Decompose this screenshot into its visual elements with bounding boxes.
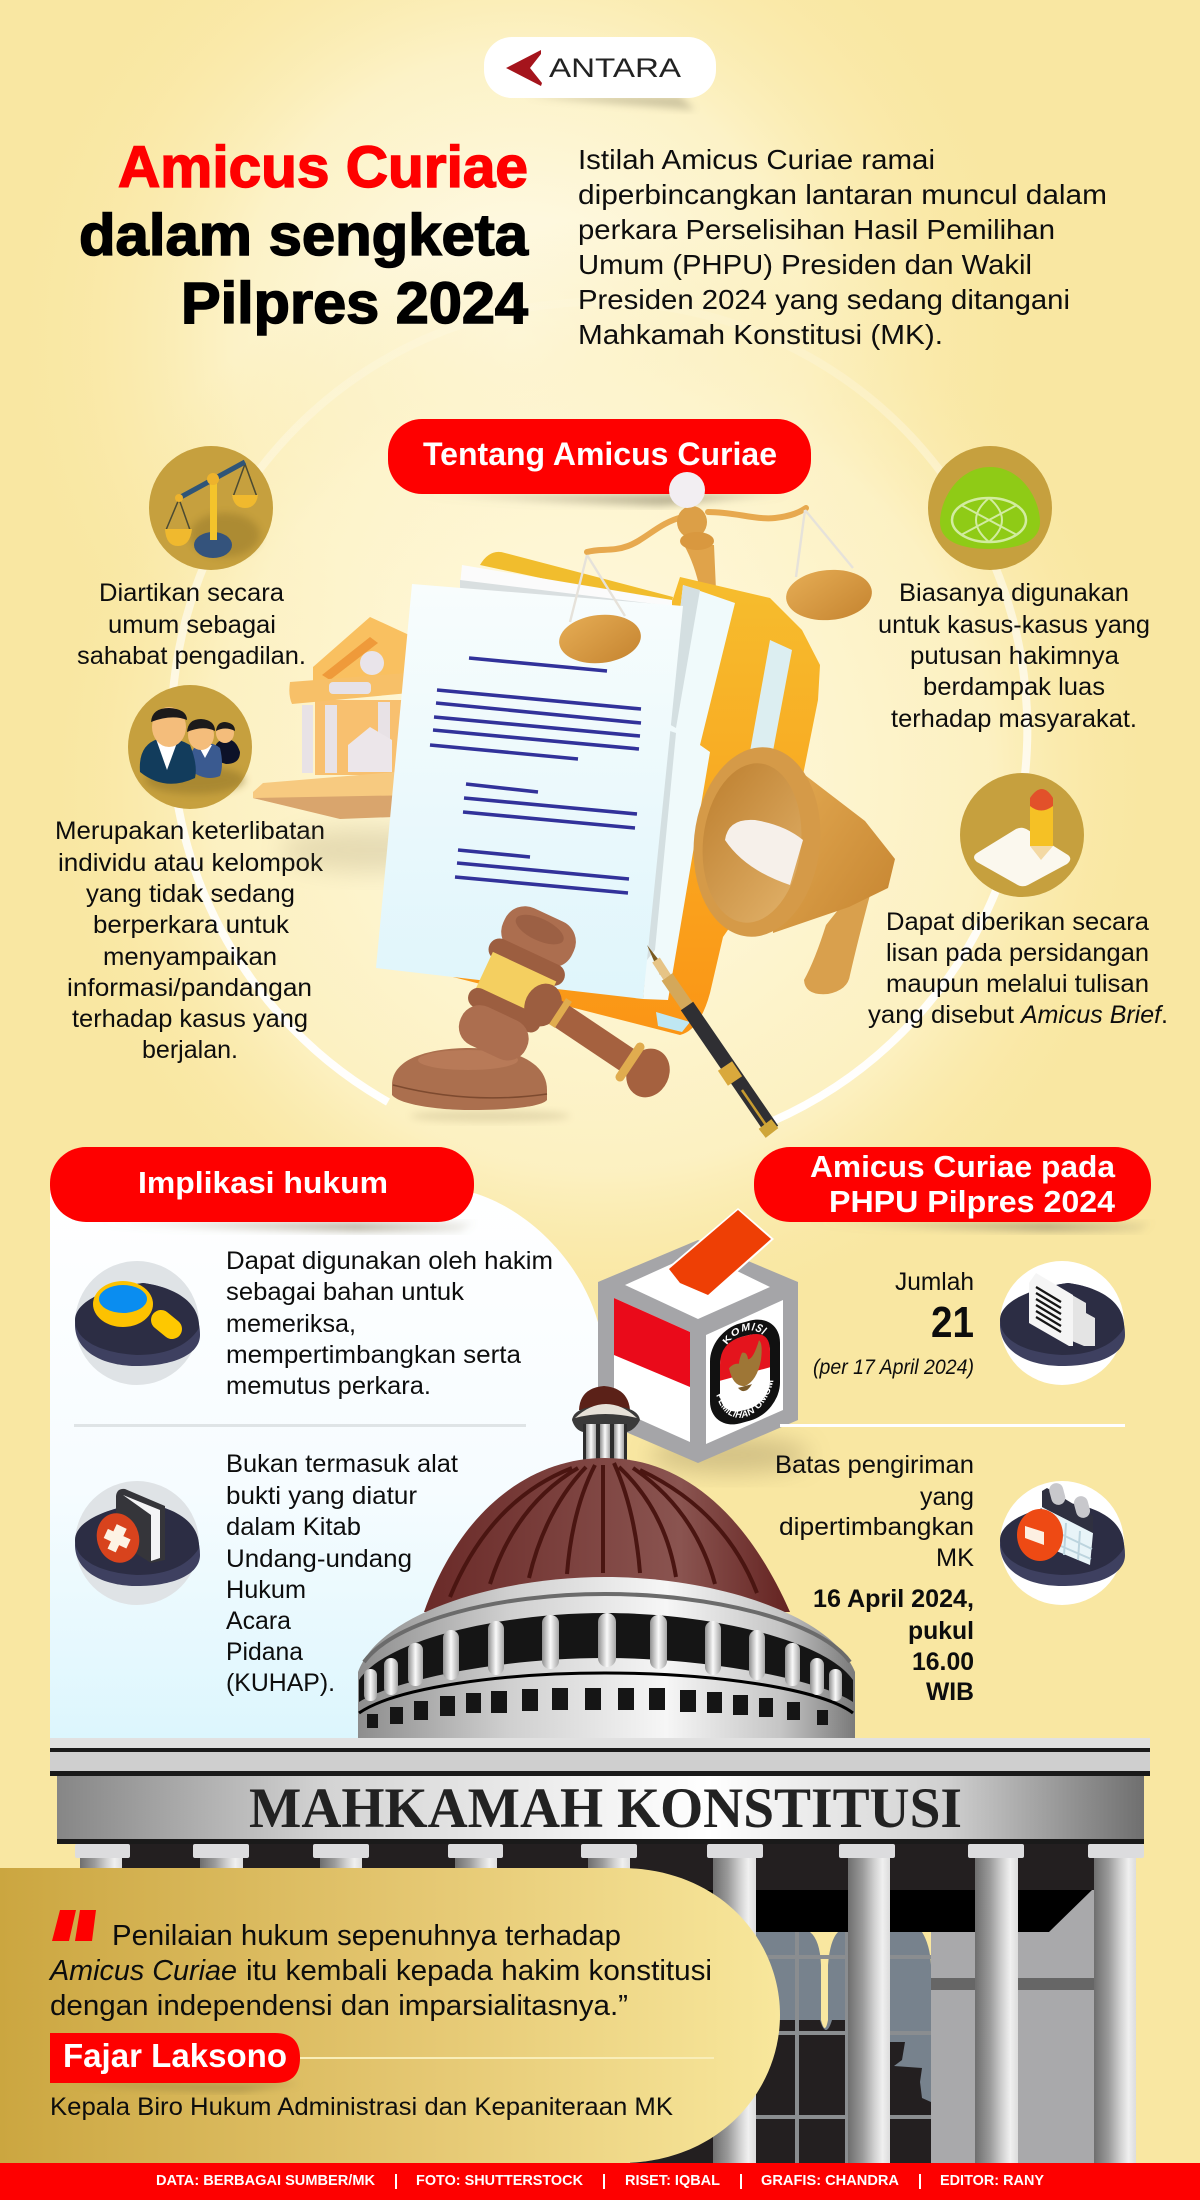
icon: fountain pen	[647, 945, 772, 1133]
text: kasus berdampak luas: terhadap masyarakat.	[891, 705, 1137, 733]
text: keterlibatan: informasi/pandangan	[67, 974, 312, 1002]
icon: calendar	[1000, 1481, 1125, 1605]
icon: gavel	[392, 898, 678, 1122]
logo: ANTARA	[484, 37, 716, 110]
text: keterlibatan: individu atau kelompok	[58, 849, 324, 877]
icon: KPU emblem: PEMILIHAN UMUM	[716, 1380, 774, 1418]
text: keterlibatan: berperkara untuk	[93, 911, 290, 939]
intro text	[578, 144, 1107, 350]
icon: ballot box	[598, 1208, 812, 1482]
text: batas pengiriman: 16 April 2024,	[813, 1585, 974, 1613]
text: lisan atau tulisan: lisan pada persidangan	[886, 939, 1149, 967]
text: definisi	[77, 579, 306, 670]
heading pill: Tentang Amicus Curiae: Tentang Amicus Curiae	[423, 436, 777, 472]
icon: book with cross	[75, 1481, 200, 1605]
text: lisan atau tulisan: maupun melalui tulisan	[886, 970, 1149, 998]
icon: quotation mark	[52, 1910, 96, 1941]
text: keterlibatan: yang tidak sedang	[86, 880, 295, 908]
logo: ANTARA: ANTARA	[549, 53, 681, 83]
icon: KPU emblem	[710, 1320, 780, 1424]
icon: document sheets	[376, 584, 735, 1000]
text: lisan atau tulisan	[868, 908, 1168, 1029]
icon: court building	[253, 617, 460, 872]
heading pill: PHPU Pilpres 2024: Amicus Curiae pada	[810, 1149, 1116, 1184]
quote text: Amicus Curiae	[48, 1955, 237, 1987]
icon: KPU emblem: KOMISI	[722, 1322, 768, 1344]
text: batas pengiriman: MK	[936, 1544, 974, 1572]
dome	[358, 1386, 855, 1740]
icon: people on gold circle	[128, 685, 252, 809]
footer credits: DATA: BERBAGAI SUMBER/MK	[156, 2172, 375, 2189]
icon: magnifier	[75, 1261, 200, 1385]
label: Mahkamah Konstitusi: MAHKAMAH KONSTITUSI	[249, 1777, 962, 1840]
quote text	[48, 1920, 712, 2022]
text: bukan alat bukti: dalam Kitab	[226, 1513, 361, 1541]
text: bukan alat bukti: (KUHAP).	[226, 1669, 335, 1697]
title: Amicus Curiae	[118, 135, 528, 200]
speaker name pill: Fajar Laksono	[63, 2037, 287, 2074]
intro text: perkara Perselisihan Hasil Pemilihan	[578, 214, 1055, 245]
text: batas pengiriman: Batas pengiriman	[775, 1451, 974, 1479]
intro text: Umum (PHPU) Presiden dan Wakil	[578, 249, 1032, 280]
text: lisan atau tulisan: .	[1161, 1001, 1168, 1029]
icon: documents	[1000, 1261, 1125, 1385]
heading pill: PHPU Pilpres 2024	[754, 1147, 1151, 1232]
text: batas pengiriman: pukul	[908, 1617, 974, 1645]
icon: big balance scale	[557, 472, 874, 667]
text: jumlah: 21	[931, 1298, 974, 1347]
quote text: dengan independensi dan imparsialitasnya.”	[50, 1990, 628, 2022]
text: bukan alat bukti: Acara	[226, 1607, 291, 1635]
text: kasus berdampak luas: berdampak luas	[923, 673, 1105, 701]
building entablature	[50, 1738, 1150, 1844]
icon: megaphone	[684, 741, 895, 994]
text: kasus berdampak luas	[878, 579, 1150, 733]
heading pill: Tentang Amicus Curiae	[388, 419, 811, 506]
drum	[358, 1577, 855, 1740]
text: bukan alat bukti: Pidana	[226, 1638, 303, 1666]
decorative ring behind illustration	[171, 302, 1027, 1121]
heading pill: PHPU Pilpres 2024: PHPU Pilpres 2024	[829, 1184, 1116, 1219]
icon: pencil on gold circle	[960, 773, 1084, 897]
speaker role: Kepala Biro Hukum Administrasi dan Kepaniteraan MK	[50, 2093, 673, 2121]
heading pill: Implikasi hukum: Implikasi hukum	[138, 1165, 388, 1200]
text: bukan alat bukti	[226, 1450, 458, 1697]
text: bukan alat bukti: Undang-undang	[226, 1545, 412, 1573]
text: keterlibatan: menyampaikan	[103, 943, 277, 971]
text: bahan pertimbangan: mempertimbangkan serta	[226, 1341, 521, 1369]
text: batas pengiriman: 16.00	[912, 1648, 974, 1676]
icon: orange folder	[453, 552, 820, 1035]
title: dalam sengketa	[79, 203, 529, 268]
panel background	[50, 1185, 612, 1740]
intro text: diperbincangkan lantaran muncul dalam	[578, 179, 1107, 210]
text: kasus berdampak luas: putusan hakimnya	[910, 642, 1119, 670]
text: keterlibatan: terhadap kasus yang	[72, 1005, 308, 1033]
dome cap	[424, 1458, 790, 1612]
building columns	[75, 1844, 1144, 2163]
icon: scale post	[684, 545, 716, 590]
title	[79, 135, 529, 336]
speaker name pill	[50, 2033, 714, 2092]
text: batas pengiriman: dipertimbangkan	[779, 1513, 974, 1541]
text: bukan alat bukti: Bukan termasuk alat	[226, 1450, 458, 1478]
title: Pilpres 2024	[181, 271, 528, 336]
illustration: gedung Mahkamah Konstitusi	[50, 1386, 1150, 2163]
text: jumlah: Jumlah	[895, 1268, 974, 1296]
text: kasus berdampak luas: untuk kasus-kasus yang	[878, 611, 1150, 639]
quote text: itu kembali kepada hakim konstitusi	[246, 1955, 712, 1987]
intro text: Mahkamah Konstitusi (MK).	[578, 319, 943, 350]
text: keterlibatan: Merupakan keterlibatan	[55, 817, 325, 845]
text: bukan alat bukti: bukti yang diatur	[226, 1482, 417, 1510]
text: jumlah	[813, 1268, 974, 1379]
text: bukan alat bukti: Hukum	[226, 1576, 306, 1604]
text: jumlah: (per 17 April 2024)	[813, 1356, 974, 1379]
footer credits	[0, 2163, 1200, 2200]
text: definisi: sahabat pengadilan.	[77, 642, 306, 670]
text: definisi: umum sebagai	[108, 611, 276, 639]
text: kasus berdampak luas: Biasanya digunakan	[899, 579, 1129, 607]
lantern	[572, 1386, 640, 1460]
icon: globe on gold circle	[928, 446, 1052, 570]
text: bahan pertimbangan: memutus perkara.	[226, 1372, 431, 1400]
footer credits: GRAFIS: CHANDRA	[761, 2172, 899, 2189]
text: batas pengiriman	[775, 1451, 974, 1706]
footer credits: FOTO: SHUTTERSTOCK	[416, 2172, 583, 2189]
text: batas pengiriman: yang	[920, 1483, 974, 1511]
text: bahan pertimbangan: memeriksa,	[226, 1310, 356, 1338]
text: lisan atau tulisan: Amicus Brief	[1019, 1001, 1164, 1029]
text: lisan atau tulisan: Dapat diberikan secara	[886, 908, 1149, 936]
text: definisi: Diartikan secara	[99, 579, 284, 607]
text: bahan pertimbangan	[226, 1247, 553, 1400]
panel: Amicus Curiae pada PHPU	[574, 1147, 1151, 1706]
intro text: Istilah Amicus Curiae ramai	[578, 144, 935, 175]
text: bahan pertimbangan: sebagai bahan untuk	[226, 1278, 464, 1306]
text: bahan pertimbangan: Dapat digunakan oleh hakim	[226, 1247, 553, 1275]
text: keterlibatan: berjalan.	[142, 1036, 238, 1064]
quote text: Penilaian hukum sepenuhnya terhadap	[112, 1920, 621, 1952]
text: batas pengiriman: WIB	[926, 1678, 974, 1706]
footer credits: EDITOR: RANY	[940, 2172, 1044, 2189]
panel: implikasi hukum	[50, 1147, 612, 1740]
text: keterlibatan	[55, 817, 325, 1064]
icon: scales on gold circle	[149, 446, 273, 570]
panel: quote	[0, 1868, 780, 2163]
footer credits: RISET: IQBAL	[625, 2172, 720, 2189]
central illustration	[253, 472, 895, 1133]
intro text: Presiden 2024 yang sedang ditangani	[578, 284, 1070, 315]
heading pill: Implikasi hukum	[50, 1147, 474, 1232]
building interior	[122, 1844, 1094, 2163]
text: lisan atau tulisan: yang disebut	[868, 1001, 1014, 1029]
